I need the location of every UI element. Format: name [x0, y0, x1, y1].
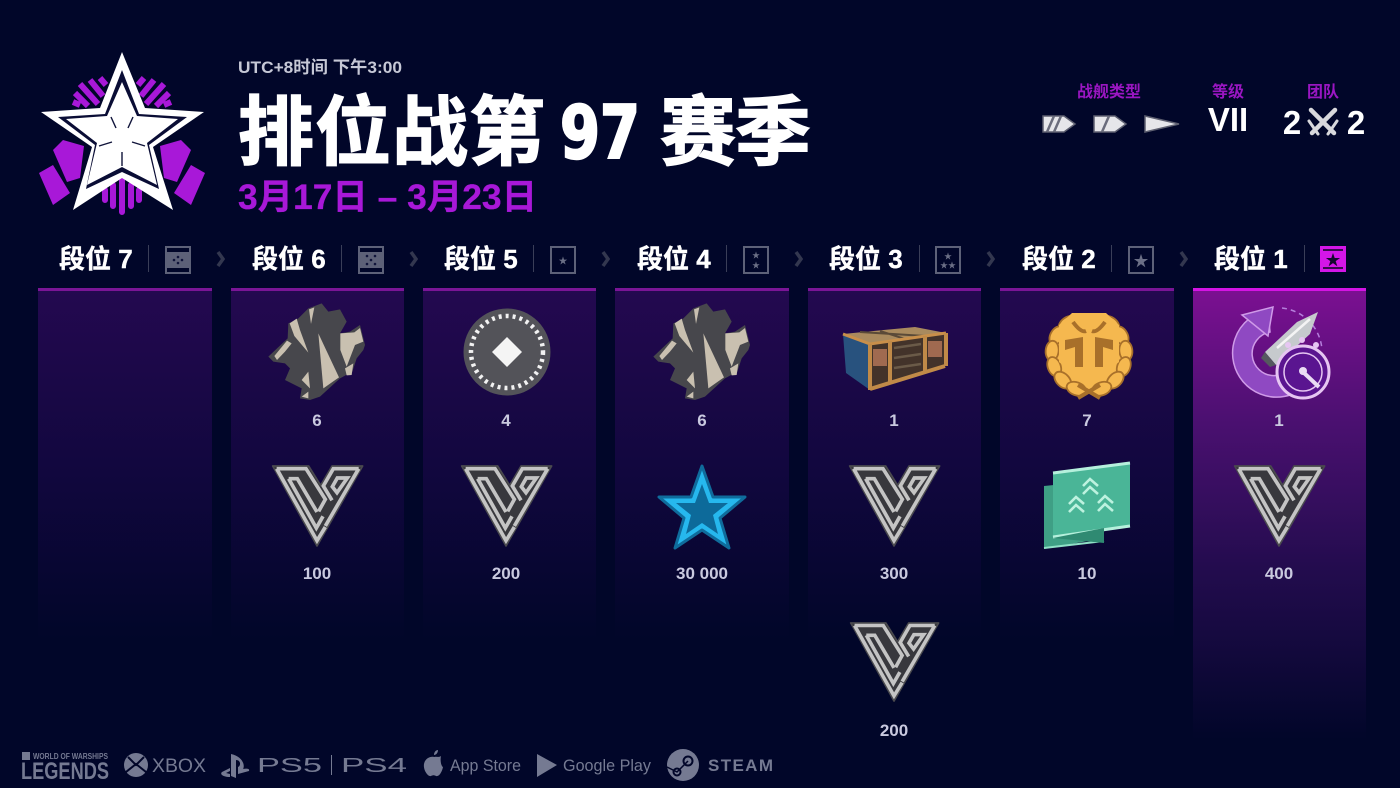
title: 排位战第 [238, 71, 545, 181]
team size: 2 [1347, 104, 1365, 141]
title end: 赛季 [660, 71, 811, 181]
panel: rank 2 rewards [1000, 288, 1174, 640]
logo: PlayStation 5 and 4: PS4 [341, 755, 407, 777]
count: camouflage: 6 [312, 411, 322, 430]
logo: Google Play [537, 754, 651, 777]
icon: green flags [1044, 463, 1130, 549]
date range: 3月17日 – 3月23日 [238, 178, 537, 217]
count: credits: 30 000 [676, 564, 728, 583]
ship types label: 战舰类型 [1077, 82, 1141, 101]
rank header: 5 [444, 244, 608, 274]
title number: 97 [560, 91, 640, 176]
panel: rank 3 rewards [808, 288, 981, 640]
tier value: VII [1208, 101, 1248, 138]
tier label: 等级 [1212, 82, 1244, 101]
count: camouflage: 6 [697, 411, 707, 430]
team label: 团队 [1307, 83, 1339, 101]
rank header: 1 [1214, 244, 1346, 274]
panel: rank 7 rewards [38, 288, 212, 640]
icon: battleship class [1145, 116, 1179, 132]
rank header: 2 [1022, 244, 1186, 274]
team size: 2 [1283, 104, 1301, 141]
rank header: 4: 段位 4 [637, 244, 711, 274]
rank header: 6: 段位 6 [252, 244, 326, 274]
panel: rank 5 rewards [423, 288, 596, 640]
icon: signal disc [464, 308, 550, 396]
rank header: 2: ★ [1133, 253, 1149, 270]
rank header: 4: ★ [752, 261, 760, 270]
icon: blue star credits [659, 466, 745, 548]
logo: App Store: App Store [450, 756, 521, 775]
time text: UTC+8时间 下午3:00 [238, 57, 402, 77]
count: rank tokens: 200 [492, 564, 520, 583]
panel: rank 6 rewards [231, 288, 404, 640]
rank header: 1: ★ [1325, 252, 1341, 269]
icon: camouflage [653, 303, 750, 400]
rank header: 4 [637, 244, 801, 274]
panel: rank 4 rewards [615, 288, 789, 640]
count: rank tokens: 400 [1265, 564, 1293, 583]
icon: ranked battles star emblem [39, 52, 205, 212]
count: crate: 1 [889, 411, 899, 430]
rank header: 3: 段位 3 [829, 244, 903, 274]
rank header: 7 [59, 244, 223, 274]
logo: Xbox: XBOX [152, 756, 206, 777]
logo: Google Play: Google Play [563, 756, 651, 775]
rank header: 5: ★ [558, 256, 568, 266]
count: booster: 1 [1274, 411, 1284, 430]
rank header: 5: 段位 5 [444, 244, 518, 274]
logo: World of Warships Legends: LEGENDS [21, 758, 109, 785]
rank header: 2: 段位 2 [1022, 244, 1096, 274]
count: signals: 4 [501, 411, 511, 430]
logo: PlayStation 5 and 4 [221, 754, 407, 778]
count: rank tokens: 300 [880, 564, 908, 583]
logo: Xbox [124, 753, 206, 777]
icon: crossed swords [1309, 110, 1337, 134]
rank header: 4: ★ [752, 251, 760, 260]
logo: App Store [424, 750, 521, 776]
rank header: 1: 段位 1 [1214, 244, 1288, 274]
extra reward: rank token [851, 623, 939, 740]
rank header: 3: ★ [944, 252, 952, 261]
icon: rank token [850, 466, 940, 546]
logo: World of Warships Legends [21, 752, 109, 785]
count: flags: 10 [1078, 564, 1096, 583]
logo: Steam: STEAM [708, 756, 773, 775]
count: rank tokens: 100 [303, 564, 331, 583]
icon: gold laurel medal [1045, 313, 1133, 398]
icon: rank token [273, 466, 363, 546]
logo: PlayStation 5 and 4: PS5 [257, 755, 322, 777]
footer platform logos [21, 749, 773, 785]
icon: rank token [462, 466, 552, 546]
icon: reload booster [1233, 307, 1329, 398]
icon: camouflage [268, 303, 365, 400]
panel: rank 1 rewards [1193, 288, 1366, 740]
team size [1283, 104, 1365, 141]
rank header: 3: ★★ [940, 261, 956, 270]
icon: destroyer class [1043, 116, 1075, 132]
rank header: 3 [829, 244, 993, 274]
count: extra rank tokens: 200 [880, 721, 908, 740]
logo: World of Warships Legends: WORLD OF WARSHIPS [33, 752, 109, 761]
icon: wooden crate [843, 327, 946, 390]
logo: Steam [667, 749, 773, 781]
rank header: 7: 段位 7 [59, 244, 133, 274]
rank header: 6 [252, 244, 416, 274]
icon: rank token [1235, 466, 1325, 546]
count: medals: 7 [1082, 411, 1092, 430]
icon: cruiser class [1094, 116, 1126, 132]
